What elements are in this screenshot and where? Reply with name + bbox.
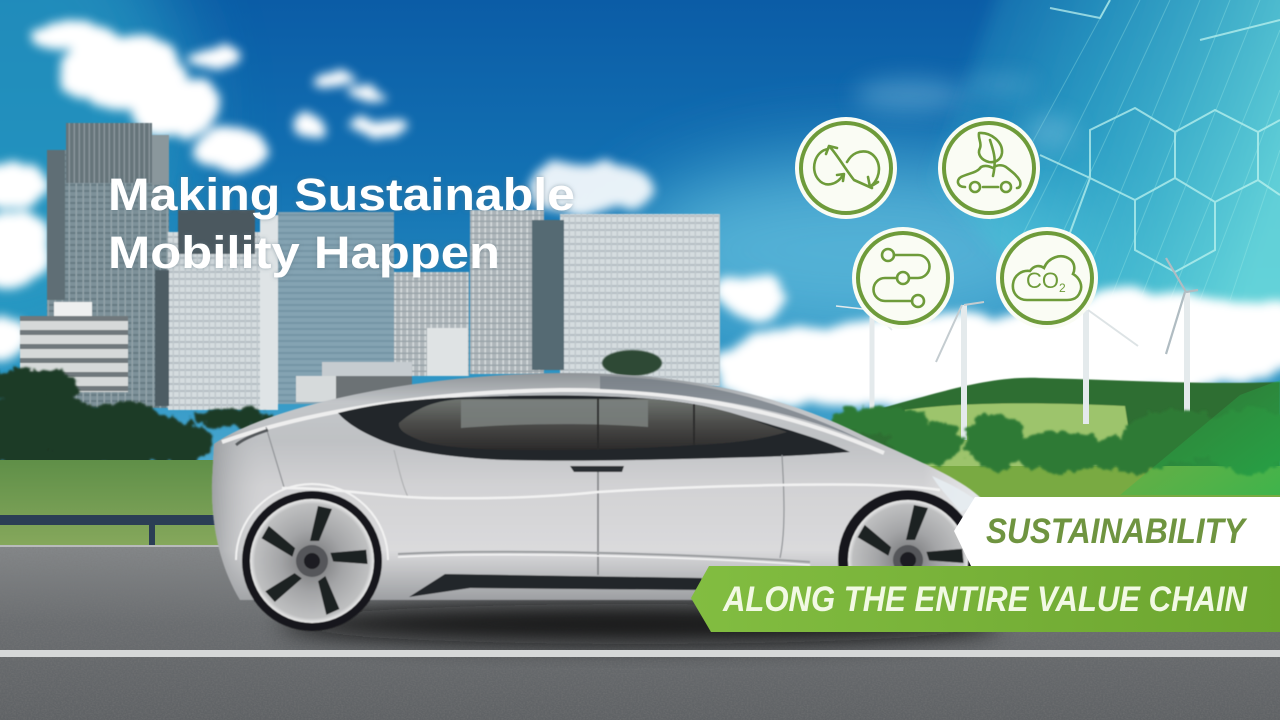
icon badge: CO2 cloud: CO bbox=[1026, 268, 1059, 293]
turbine 3 bbox=[1086, 310, 1138, 424]
lane marking bbox=[0, 650, 1280, 657]
door handle bbox=[570, 466, 624, 472]
tower: centre left bbox=[155, 210, 278, 410]
front wheel bbox=[838, 490, 978, 630]
low building left bbox=[20, 302, 128, 392]
tower: grey right bbox=[470, 210, 544, 374]
distant green hills bbox=[835, 378, 1280, 480]
green diagonal overlay bbox=[1120, 380, 1280, 495]
guard rail bbox=[0, 515, 230, 545]
right grass bbox=[920, 466, 1280, 500]
wind turbines bbox=[836, 258, 1198, 440]
roof shadow bbox=[600, 376, 870, 444]
title bbox=[108, 169, 575, 278]
icon badge: circular economy bbox=[795, 117, 897, 219]
title line 2: Mobility Happen bbox=[108, 227, 500, 278]
icon badge: CO2 cloud bbox=[996, 227, 1098, 329]
palm tree bbox=[602, 350, 662, 376]
side sill bbox=[409, 574, 702, 597]
glass reflection bbox=[461, 400, 648, 428]
body creases and door lines bbox=[236, 427, 940, 575]
icon badge: CO2 cloud: 2 bbox=[1059, 281, 1066, 295]
trees left bbox=[0, 369, 275, 468]
headlight bbox=[932, 476, 980, 512]
technology hexagon overlay bbox=[930, 0, 1280, 320]
trees right bbox=[830, 406, 1280, 473]
banner: sustainability: SUSTAINABILITY bbox=[986, 512, 1247, 551]
side glass bbox=[399, 399, 787, 450]
tower: blue centre bbox=[278, 212, 394, 404]
title line 1: Making Sustainable bbox=[108, 169, 575, 220]
tower: tall left bbox=[47, 123, 169, 408]
rear wheel bbox=[236, 484, 388, 631]
banner: sustainability bbox=[954, 497, 1280, 566]
road bbox=[0, 545, 1280, 720]
left grass bbox=[0, 460, 230, 547]
turbine 1 bbox=[836, 306, 892, 415]
city skyline bbox=[20, 123, 720, 410]
window surround bbox=[338, 395, 850, 461]
faint high clouds bbox=[855, 78, 1076, 148]
turbine 4 bbox=[1166, 258, 1198, 416]
icon badge: green car with leaf bbox=[938, 117, 1040, 219]
car body bbox=[212, 373, 985, 600]
roof highlight bbox=[222, 390, 884, 453]
tower: large right bbox=[532, 214, 720, 386]
icon badge: value chain route bbox=[852, 227, 954, 329]
banner: along the entire value chain bbox=[691, 566, 1280, 632]
sky background bbox=[0, 0, 1280, 560]
car bbox=[212, 373, 985, 631]
turbine 2 bbox=[936, 302, 984, 440]
door pillars bbox=[598, 398, 694, 450]
car shadow bbox=[280, 604, 1000, 644]
low building centre bbox=[296, 362, 412, 402]
clouds bbox=[0, 23, 1280, 410]
tower: mid bbox=[394, 272, 469, 376]
